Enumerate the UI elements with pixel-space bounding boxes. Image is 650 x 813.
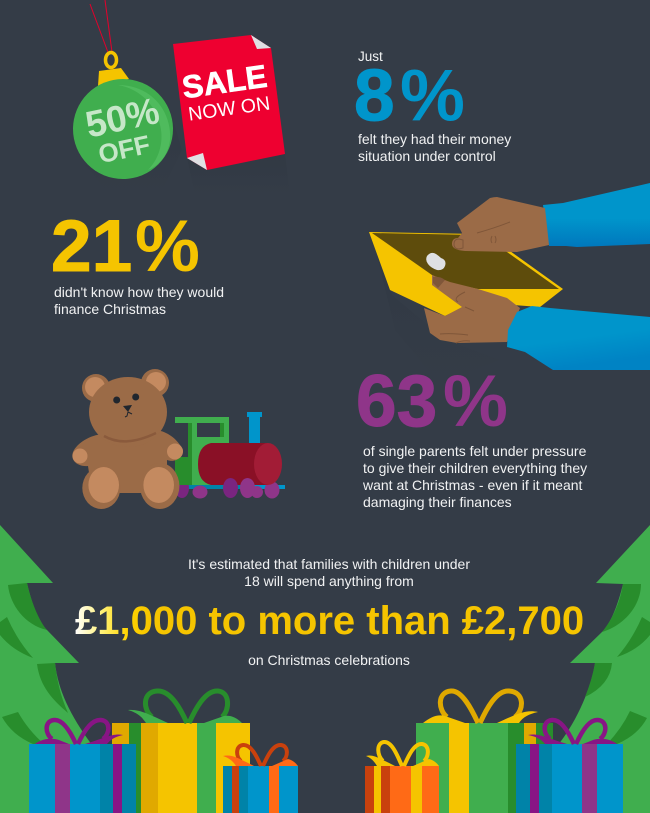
stat: 63 percent: to give their children everything they	[363, 460, 587, 476]
top sleeve	[543, 183, 650, 247]
bottom hand	[424, 275, 520, 343]
headline spend range: £1,000 to more than £2,700	[75, 599, 584, 643]
bear face	[113, 394, 139, 417]
bear paws	[72, 444, 183, 464]
stat: 21 percent: finance Christmas	[54, 301, 166, 317]
illustration: bauble 50% off: 50%	[82, 90, 163, 146]
gift: big green, right	[416, 691, 553, 813]
stat: 63 percent: 63	[356, 361, 437, 442]
train cab	[175, 417, 229, 485]
stat: 21 percent	[51, 206, 224, 317]
top hand	[452, 197, 549, 252]
wallet inside	[372, 233, 559, 289]
gift: big yellow, left	[112, 691, 250, 813]
illustration: bauble 50% off: OFF	[96, 129, 153, 169]
top hand details	[454, 222, 510, 249]
stat: 8 percent: felt they had their money	[358, 131, 511, 147]
bear collar line	[104, 433, 156, 441]
gift: small orange with yellow ribbon	[365, 742, 439, 813]
closing text block: It's estimated that families with children under	[188, 556, 470, 572]
stat: 63 percent: want at Christmas - even if it meant	[362, 477, 583, 493]
coin	[426, 253, 446, 270]
train boiler	[198, 443, 268, 485]
stat: 21 percent: didn't know how they would	[54, 284, 224, 300]
train funnel	[247, 412, 262, 444]
left christmas tree	[0, 525, 92, 813]
stat: 21 percent: %	[135, 206, 200, 287]
illustration: teddy bear	[72, 369, 183, 509]
closing text block: on Christmas celebrations	[248, 652, 410, 668]
bottom hand details	[433, 277, 445, 288]
illustration: toy train	[175, 412, 285, 498]
illustration: sale poster: SALE	[180, 58, 269, 105]
illustration: sale poster	[173, 35, 290, 195]
stat: 21 percent: 21	[51, 206, 132, 287]
gift: blue with purple ribbon, left	[29, 720, 136, 813]
illustration: bauble 50% off	[73, 0, 182, 195]
stat: 63 percent: damaging their finances	[363, 494, 512, 510]
stat: 8 percent: situation under control	[358, 148, 496, 164]
bear body	[72, 430, 183, 493]
bottom hand creases	[440, 292, 474, 343]
stat: 63 percent: %	[443, 361, 508, 442]
closing text block	[75, 556, 584, 668]
bear ears	[82, 369, 169, 402]
train base and wheels behind	[175, 478, 285, 498]
bear head	[89, 377, 167, 447]
gift: blue with purple ribbon, right	[516, 720, 623, 813]
wallet	[369, 232, 563, 316]
gift: small blue with orange ribbon	[223, 745, 298, 813]
illustration: sale poster: NOW ON	[187, 92, 271, 126]
illustration: hands holding empty wallet	[369, 183, 650, 385]
stat: 63 percent: of single parents felt under pressure	[363, 443, 587, 459]
stat: 8 percent: %	[400, 56, 465, 136]
bear feet	[82, 463, 179, 509]
stat: 8 percent: Just	[358, 49, 383, 64]
stat: 63 percent	[356, 361, 587, 510]
stat: 8 percent	[354, 49, 511, 164]
train front wheels	[223, 478, 255, 498]
stat: 8 percent: 8	[354, 56, 395, 136]
right christmas tree	[558, 525, 650, 813]
closing text block: 18 will spend anything from	[244, 573, 414, 589]
bottom sleeve	[507, 306, 650, 370]
